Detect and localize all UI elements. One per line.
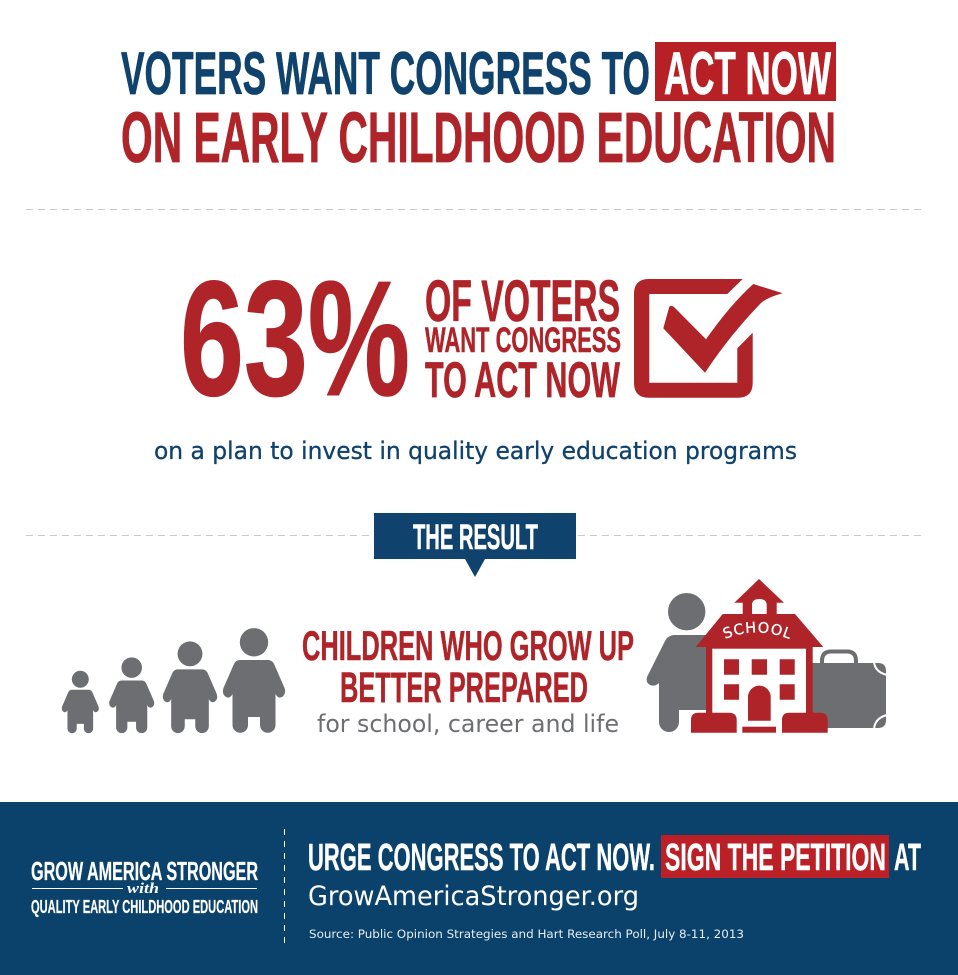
statistic caption: WANT CONGRESS	[425, 321, 621, 360]
child 3	[163, 641, 217, 733]
statistic caption: OF VOTERS	[425, 269, 620, 334]
result text: for school, career and life	[317, 710, 619, 738]
subheading: on a plan to invest in quality early education programs	[154, 437, 797, 465]
suitcase	[805, 652, 887, 729]
child 4	[223, 628, 285, 733]
highlight: act now: ACT NOW	[664, 40, 831, 107]
icon: children growing	[62, 628, 285, 733]
call to action	[308, 835, 921, 912]
icon: checkbox	[634, 279, 783, 398]
logo: grow america stronger: QUALITY EARLY CHILDHOOD EDUCATION	[31, 896, 258, 917]
call to action: GrowAmericaStronger.org	[308, 881, 639, 912]
statistic caption	[425, 269, 621, 408]
logo: grow america stronger: GROW AMERICA STRONGER	[31, 856, 258, 886]
statistic caption: TO ACT NOW	[425, 352, 620, 408]
result text: CHILDREN WHO GROW UP	[302, 622, 634, 669]
highlight: act now	[655, 40, 836, 107]
footer panel	[0, 802, 958, 975]
school building: SCHOOL	[722, 622, 790, 640]
result text: BETTER PREPARED	[340, 664, 588, 712]
school building	[691, 579, 828, 733]
child 2	[109, 657, 154, 733]
call to action: AT	[894, 837, 921, 879]
callout: the result: THE RESULT	[413, 518, 538, 557]
source: Source: Public Opinion Strategies and Hart Research Poll, July 8-11, 2013	[309, 927, 744, 941]
title	[121, 40, 836, 178]
person silhouette	[647, 593, 712, 732]
result text	[302, 622, 634, 738]
statistic: 63 percent: 63%	[180, 247, 410, 430]
icon: graduate with suitcase and school	[646, 579, 886, 733]
logo: grow america stronger	[31, 856, 258, 917]
logo: grow america stronger: with	[127, 881, 159, 897]
call to action: URGE CONGRESS TO ACT NOW.	[308, 837, 655, 879]
callout: the result	[374, 513, 576, 577]
child 1	[62, 671, 99, 733]
